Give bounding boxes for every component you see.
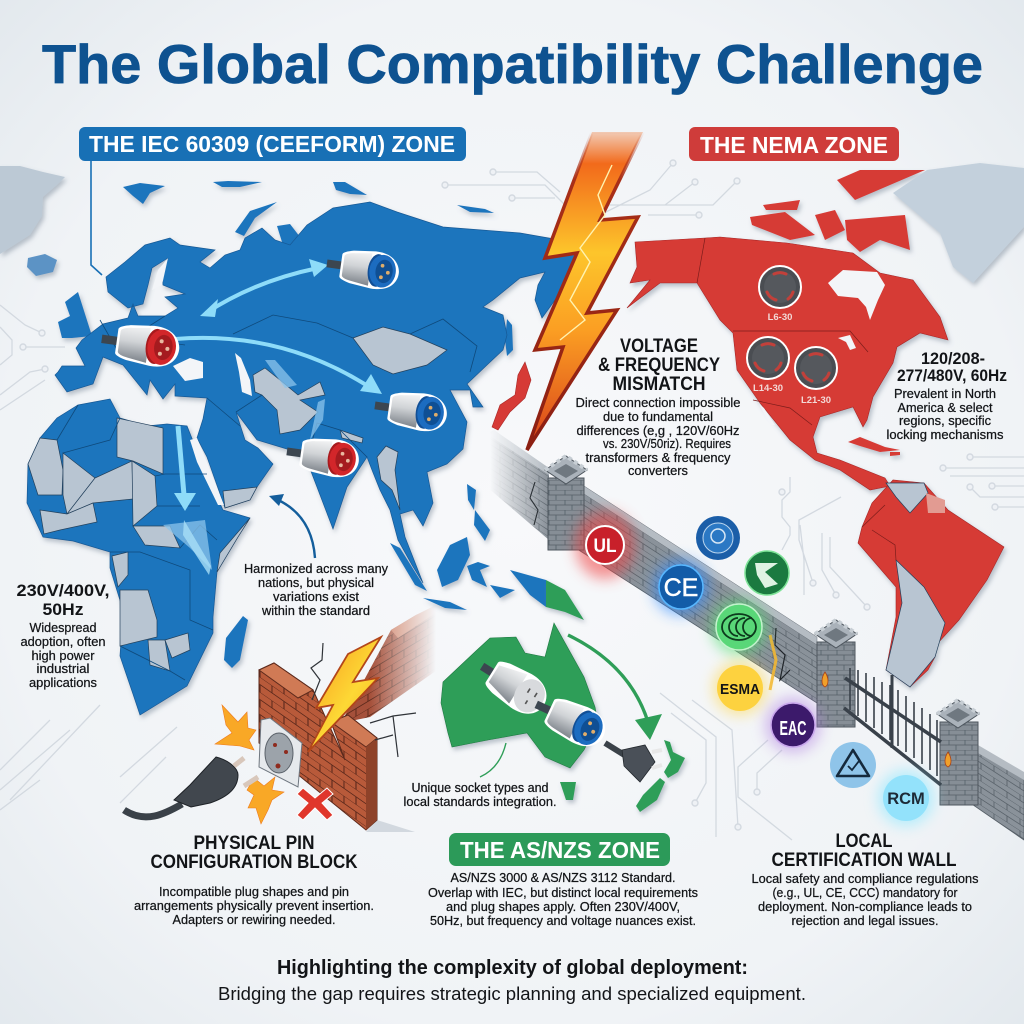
- text: unique socket note: local standards integration.: [404, 794, 556, 809]
- text: IEC specification: 50Hz: [42, 600, 84, 619]
- Arctic islands of Canada: [750, 170, 925, 252]
- badge: RCM: [878, 770, 934, 826]
- heading: voltage mismatch: VOLTAGE: [620, 336, 698, 357]
- text: voltage mismatch description: Direct connection impossible: [576, 395, 740, 410]
- icon: spark bursts: [215, 705, 284, 824]
- text: unique socket note: Unique socket types and: [412, 780, 548, 795]
- zone label: IEC: THE IEC 60309 (CEEFORM) ZONE: [89, 131, 455, 157]
- text: voltage mismatch description: converters: [628, 463, 688, 478]
- text: NEMA specification: locking mechanisms: [886, 427, 1004, 442]
- text: NEMA specification: regions, specific: [899, 413, 991, 428]
- connector: grey socket: [472, 650, 554, 722]
- badge: EAC: EAC: [780, 718, 806, 740]
- text: AS/NZS description: [428, 870, 698, 928]
- panel: local certification wall: [483, 430, 1024, 928]
- badge: triangle check: [830, 742, 876, 788]
- grey non-member countries in South America: [886, 483, 945, 687]
- Hudson Bay and Great Lakes cut-outs: [759, 270, 885, 425]
- panel: voltage and frequency mismatch: [527, 132, 740, 478]
- borders in North America: [697, 238, 896, 560]
- panel: IEC 60309 zone: [0, 127, 585, 715]
- NEMA socket: L14-30: L14-30: [753, 383, 783, 394]
- islands of Southeast Asia: [390, 484, 546, 610]
- zone label: NEMA: [689, 127, 899, 161]
- heading: voltage mismatch: MISMATCH: [612, 374, 706, 395]
- connector: blue plug: [528, 687, 612, 753]
- connector: red plug in Europe: [99, 319, 182, 370]
- icon: red cross: [297, 788, 333, 820]
- text: unique socket note: [404, 780, 556, 809]
- heading: physical pin block: PHYSICAL PIN: [194, 833, 314, 854]
- Africa landmass: [27, 399, 250, 715]
- Japan: [492, 362, 531, 430]
- text: harmonized note: Harmonized across many: [244, 561, 388, 576]
- Caribbean islands: [848, 437, 900, 456]
- text: IEC specification: high power: [32, 648, 95, 663]
- text: voltage mismatch description: differences (e,g , 120V/60Hz: [576, 423, 740, 438]
- Eurasia landmass: [55, 202, 585, 583]
- text: certification description: Local safety and compliance regulations: [752, 871, 979, 886]
- text: IEC specification: [16, 581, 110, 690]
- map: Eurasia and Africa: [0, 166, 585, 715]
- Iceland: [27, 254, 57, 276]
- badge: ESMA: [713, 661, 767, 715]
- text: AS/NZS description: Overlap with IEC, but distinct local requirements: [428, 885, 698, 900]
- text: AS/NZS description: AS/NZS 3000 & AS/NZS 3112 Standard.: [450, 870, 676, 885]
- text: voltage mismatch description: due to fundamental: [603, 409, 713, 424]
- heading: local certification wall: [772, 831, 957, 871]
- arrow: Europe to Russia, double headed: [206, 268, 318, 313]
- non-member countries in grey: [28, 327, 447, 671]
- badge: green mark: [745, 551, 789, 595]
- heading: local certification wall: CERTIFICATION WALL: [772, 850, 957, 871]
- zone label: AS/NZS: THE AS/NZS ZONE: [460, 837, 660, 863]
- footer summary: Highlighting the complexity of global deployment:: [277, 957, 748, 979]
- heading: physical pin block: CONFIGURATION BLOCK: [150, 852, 358, 873]
- panel: physical pin configuration block: [124, 603, 440, 927]
- text: voltage mismatch description: vs. 230V/50riz). Requires: [603, 436, 731, 451]
- text: NEMA specification: 277/480V, 60Hz: [897, 366, 1007, 385]
- text: IEC specification: Widespread: [30, 620, 96, 635]
- text: IEC specification: adoption, often: [20, 634, 106, 649]
- text: certification description: rejection and legal issues.: [792, 913, 938, 928]
- cracks: [311, 643, 416, 757]
- connector: black plug: [605, 743, 662, 782]
- NEMA socket: L14-30: [747, 337, 789, 394]
- NEMA socket: L6-30: L6-30: [768, 312, 792, 323]
- text: voltage mismatch description: transformers & frequency: [586, 450, 731, 465]
- icon: black plug: [124, 757, 258, 817]
- arrow: North Africa southward: [174, 426, 211, 575]
- heading: physical pin block: [150, 833, 358, 873]
- text: IEC specification: 230V/400V,: [16, 581, 110, 600]
- Madagascar: [224, 616, 248, 668]
- connector: blue plug in China: [372, 387, 449, 434]
- text: physical pin description: arrangements physically prevent insertion.: [134, 898, 374, 913]
- NEMA socket: L21-30: L21-30: [801, 395, 831, 406]
- leader curve to socket note: [480, 743, 506, 777]
- country borders: [57, 315, 477, 680]
- badge: CE: [653, 559, 709, 615]
- connector: blue plug in Russia: [324, 245, 401, 292]
- leader line from label to map: [91, 161, 102, 275]
- panel: Australia, New Zealand and AS/NZS zone: [404, 580, 698, 928]
- South America: [858, 480, 1004, 687]
- connector: red plug in India: [284, 433, 361, 480]
- illustration: broken brick wall: [259, 603, 440, 832]
- text: NEMA specification: Prevalent in North: [894, 386, 996, 401]
- zone label: NEMA: THE NEMA ZONE: [700, 132, 888, 158]
- text: harmonized note: nations, but physical: [258, 575, 374, 590]
- sea cut-outs: [152, 258, 252, 505]
- text: AS/NZS description: and plug shapes apply. Often 230V/400V,: [446, 899, 680, 914]
- Greenland west part: [0, 166, 65, 254]
- text: NEMA specification: [886, 349, 1007, 442]
- panel: NEMA zone: [627, 127, 1024, 687]
- footer summary: Bridging the gap requires strategic planning and specialized equipment.: [218, 983, 806, 1004]
- icon: central lightning bolt: [527, 132, 643, 450]
- icon: lightning bolt on wall: [308, 637, 381, 752]
- text: voltage mismatch description: [576, 395, 740, 478]
- text: certification description: deployment. Non-compliance leads to: [758, 899, 972, 914]
- icon: wall socket: [259, 718, 302, 787]
- footer summary: [218, 957, 806, 1004]
- map: Australia, Papua and New Zealand: [441, 580, 685, 812]
- text: physical pin description: Incompatible plug shapes and pin: [159, 884, 349, 899]
- map: the Americas: [627, 163, 1024, 687]
- text: NEMA specification: America & select: [898, 400, 993, 415]
- text: IEC specification: industrial: [36, 661, 90, 676]
- NEMA socket: L6-30: [759, 266, 801, 323]
- text: harmonized note: [244, 561, 388, 618]
- badge: UL: UL: [594, 536, 617, 557]
- badge: blue seal: [696, 516, 740, 560]
- heading: voltage mismatch: [598, 336, 720, 395]
- badge: EAC: [765, 697, 821, 753]
- badge: RCM: RCM: [887, 790, 925, 808]
- NEMA socket: L21-30: [795, 347, 837, 406]
- Greenland: [893, 163, 1024, 283]
- title: The Global Compatibility Challenge: [42, 33, 983, 95]
- arrow: harmonized callout: [269, 494, 315, 558]
- text: NEMA specification: 120/208-: [921, 349, 985, 368]
- text: IEC specification: applications: [29, 675, 97, 690]
- glow streaks on map: [163, 360, 325, 570]
- badge: CE: CE: [664, 574, 698, 602]
- text: physical pin description: [134, 884, 374, 927]
- illustration: stone wall with towers and gate: [483, 430, 1024, 840]
- text: harmonized note: variations exist: [273, 589, 359, 604]
- heading: voltage mismatch: & FREQUENCY: [598, 355, 720, 376]
- text: certification description: (e.g., UL, CE, CCC) mandatory for: [772, 885, 958, 900]
- Arctic and North Atlantic islands: [58, 181, 513, 356]
- arrow: Europe to China: [175, 338, 382, 394]
- badge: ESMA: ESMA: [720, 682, 760, 698]
- badge: UL: [575, 511, 635, 579]
- arrow: Australia to New Zealand: [568, 635, 662, 740]
- text: physical pin description: Adapters or rewiring needed.: [172, 912, 336, 927]
- text: harmonized note: within the standard: [261, 603, 370, 618]
- heading: local certification wall: LOCAL: [836, 831, 893, 852]
- North America: [627, 237, 948, 490]
- badge: CCC: [711, 599, 767, 655]
- text: certification description: [752, 871, 979, 928]
- text: AS/NZS description: 50Hz, but frequency and voltage nuances exist.: [430, 913, 696, 928]
